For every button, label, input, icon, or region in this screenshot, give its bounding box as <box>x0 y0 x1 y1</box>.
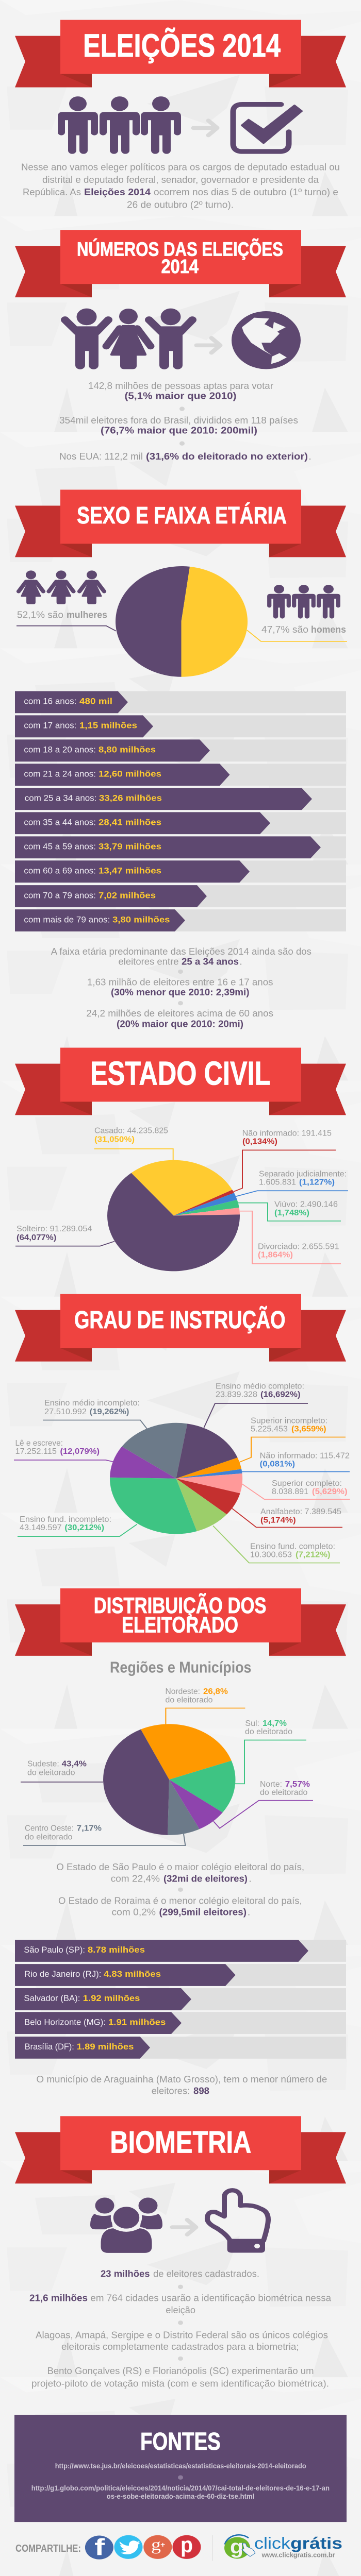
stat: fully registered colleges: eleitorais completamente cadastrados para a biometria; <box>61 2342 299 2352</box>
separator dot <box>178 970 183 974</box>
title ribbon: Grau de Instrução <box>15 1294 346 1362</box>
label: ensino fundamental incompleto <box>18 1514 137 1536</box>
text: predominant age range: . <box>239 957 242 967</box>
stat: smallest municipality <box>36 2074 327 2096</box>
title ribbon: Sexo e Faixa Etária <box>15 490 346 557</box>
label: men share <box>261 625 346 635</box>
bar: mais de 79 anos: 3,80 milhões <box>112 914 170 924</box>
label: ensino fundamental completo: Ensino fund. completo: <box>250 1541 335 1551</box>
stat: voters in the USA: . <box>308 451 311 462</box>
intro paragraph: 26 de outubro (2º turno). <box>127 200 234 210</box>
label: viúvo <box>238 1199 341 1221</box>
bar: 25 a 34 anos: com 25 a 34 anos: <box>25 793 96 803</box>
stat: registered voters <box>101 2269 259 2279</box>
bar: 35 a 44 anos: 28,41 milhões <box>99 817 161 827</box>
label: ensino médio completo: (16,692%) <box>260 1389 301 1399</box>
subheading: regiões e municípios: Regiões e Municípios <box>110 1659 252 1676</box>
label: ensino médio incompleto: (19,262%) <box>90 1406 129 1416</box>
icon: pointing hand <box>207 2190 268 2252</box>
bar: 16 anos: com 16 anos: <box>24 696 76 706</box>
label: casado: Casado: 44.235.825 <box>94 1126 168 1135</box>
label: não informado: Não informado: 115.472 <box>260 1451 350 1460</box>
stat: voters aged 16 and 17: (30% menor que 2010: 2,39mi) <box>111 988 249 998</box>
text: predominant age range: 25 a 34 anos <box>182 957 239 967</box>
panel: fontes <box>14 2415 347 2522</box>
label: women share <box>17 610 107 620</box>
label: separado judicialmente: Separado judicialmente: <box>259 1169 347 1178</box>
icon: google plus: + <box>160 2541 166 2549</box>
label: separado judicialmente: 1.605.831 <box>259 1177 296 1187</box>
bar: Brasília: Brasília (DF): <box>25 2041 74 2051</box>
bar: São Paulo: São Paulo (SP): <box>24 1944 85 1954</box>
bar: 16 anos <box>15 691 346 713</box>
section: introduction <box>15 20 346 210</box>
bar: 45 a 59 anos: 33,79 milhões <box>99 841 161 851</box>
bar: Brasília <box>15 2037 346 2059</box>
bar: 45 a 59 anos <box>15 836 346 858</box>
bar: Belo Horizonte: Belo Horizonte (MG): <box>24 2017 106 2027</box>
bar: Salvador: Salvador (BA): <box>24 1993 80 2003</box>
icon: arrow <box>196 338 220 353</box>
icon: google plus <box>143 2535 172 2559</box>
icon: pinterest: p <box>180 2533 193 2557</box>
separator dot <box>178 2320 183 2325</box>
bar: Belo Horizonte <box>15 2012 346 2034</box>
label: não informado <box>234 1128 336 1192</box>
icon: twitter <box>114 2535 142 2559</box>
bar: 17 anos: com 17 anos: <box>24 720 76 730</box>
stat: voters above 60: (20% maior que 2010: 20mi) <box>117 1019 243 1029</box>
stat: voters abroad: (76,7% maior que 2010: 200mil) <box>101 426 257 436</box>
stat: voters in the USA: (31,6% do eleitorado no exterior) <box>146 451 308 462</box>
title ribbon: Distribuição dos Eleitorado: DISTRIBUIÇÃO DOS <box>94 1593 266 1618</box>
pie chart: regions <box>103 1724 236 1835</box>
title ribbon: Distribuição dos Eleitorado: ELEITORADO <box>122 1613 238 1638</box>
separator dot <box>178 2285 183 2289</box>
section: sexo e faixa etária <box>15 490 347 1029</box>
section: números das eleições <box>15 230 346 462</box>
title ribbon: Biometria <box>15 2116 346 2183</box>
icon: three men <box>58 96 181 154</box>
stat: smallest municipality: 898 <box>193 2086 209 2096</box>
stat: cities using biometrics <box>29 2293 332 2315</box>
stat: registered voters: 23 milhões <box>101 2269 150 2279</box>
label: sul: 14,7% <box>262 1718 287 1727</box>
label: solteiro <box>15 1224 114 1246</box>
icon: pinterest <box>172 2533 201 2559</box>
stat: pilot project: Bento Gonçalves (RS) e Florianópolis (SC) experimentarão um <box>47 2366 314 2377</box>
bar: 70 a 79 anos <box>15 885 346 907</box>
icon: google plus: g <box>151 2535 161 2554</box>
intro paragraph: ocorrem nos dias 5 de outubro (1º turno) e <box>154 188 338 198</box>
logo: clickgrátis: grátis <box>290 2534 342 2552</box>
label: women share: mulheres <box>67 610 107 620</box>
stat: São Paulo largest: . <box>249 1874 252 1884</box>
label: ensino médio incompleto <box>43 1398 147 1429</box>
label: ensino fundamental incompleto: (30,212%) <box>64 1522 104 1532</box>
stat: smallest municipality: eleitores: <box>152 2086 190 2096</box>
label: superior incompleto: Superior incompleto: <box>251 1416 327 1425</box>
icon: arrow <box>172 2220 196 2234</box>
label: ensino fundamental completo: (7,212%) <box>296 1550 331 1559</box>
bar: 25 a 34 anos: 33,26 milhões <box>99 793 162 803</box>
separator dot <box>179 442 185 446</box>
label: centro oeste: Centro Oeste: <box>25 1823 74 1833</box>
label: superior completo: Superior completo: <box>272 1479 342 1488</box>
label: ensino médio incompleto: 27.510.992 <box>44 1406 87 1416</box>
stat: voters aged 16 and 17: 1,63 milhão de eleitores entre 16 e 17 anos <box>87 977 273 988</box>
label: não informado <box>242 1451 350 1472</box>
icon: facebook <box>85 2534 113 2561</box>
label: superior completo: (5,629%) <box>312 1487 348 1496</box>
title ribbon: Biometria: BIOMETRIA <box>110 2125 251 2160</box>
stat: voters in the USA: Nos EUA: 112,2 mil <box>59 451 143 462</box>
intro paragraph <box>21 162 340 210</box>
label: superior incompleto <box>239 1416 346 1462</box>
separator dot <box>178 1001 183 1005</box>
bar: Belo Horizonte: 1.91 milhões <box>108 2017 166 2027</box>
bar: 21 a 24 anos <box>15 764 346 786</box>
text: predominant age range <box>51 947 311 967</box>
label: divorciado: (1,864%) <box>258 1250 293 1259</box>
logo: clickgrátis: www.clickgratis.com.br <box>261 2551 335 2558</box>
label: nordeste: Nordeste: <box>165 1686 200 1696</box>
icon: people with raised arms <box>65 309 192 369</box>
stat: eligible voters: (5,1% maior que 2010) <box>125 391 236 401</box>
bar: 60 a 69 anos: 13,47 milhões <box>99 866 161 875</box>
stat: pilot project <box>31 2366 329 2389</box>
bar: 60 a 69 anos: com 60 a 69 anos: <box>24 866 96 875</box>
bar: 21 a 24 anos: com 21 a 24 anos: <box>24 769 96 778</box>
stat: São Paulo largest: (32mi de eleitores) <box>163 1874 248 1884</box>
title ribbon: Números das Eleições 2014 <box>15 230 346 297</box>
title ribbon: Eleições 2014 <box>15 20 346 87</box>
label: norte: do eleitorado <box>260 1788 307 1797</box>
label: não informado: (0,134%) <box>242 1137 277 1146</box>
label: casado: (31,050%) <box>94 1134 135 1144</box>
bar chart: voters by age <box>15 691 346 931</box>
label: norte <box>214 1780 313 1828</box>
label: analfabeto: Analfabeto: 7.389.545 <box>260 1506 341 1516</box>
label: lê e escreve: Lê e escreve: <box>15 1438 63 1448</box>
bar: Brasília: 1.89 milhões <box>77 2041 134 2051</box>
stat: Roraima smallest: com 0,2% <box>111 1907 156 1918</box>
stat: voters abroad: 354mil eleitores fora do Brasil, divididos em 118 países <box>59 416 298 426</box>
bar: Rio de Janeiro: 4.83 milhões <box>104 1969 161 1978</box>
bar: 60 a 69 anos <box>15 860 346 883</box>
label: norte: Norte: <box>260 1780 282 1789</box>
bar: 17 anos <box>15 715 346 737</box>
label: men share: 47,7% são <box>261 625 308 635</box>
label: ensino médio incompleto: Ensino médio incompleto: <box>44 1398 140 1408</box>
stat: cities using biometrics: eleição <box>166 2305 195 2315</box>
source link: G1 <box>31 2484 330 2500</box>
section: distribuição do eleitorado <box>15 1588 346 2096</box>
stat: voters in the USA <box>59 451 311 462</box>
pie chart: sex <box>116 566 248 677</box>
section: estado civil <box>15 1048 348 1271</box>
label: superior completo <box>242 1479 350 1499</box>
label: solteiro: Solteiro: 91.289.054 <box>17 1224 92 1233</box>
stat: cities using biometrics: 21,6 milhões <box>29 2293 88 2303</box>
stat: voters above 60: 24,2 milhões de eleitores acima de 60 anos <box>86 1009 273 1019</box>
label: men share: homens <box>311 625 346 635</box>
label: compartilhe: COMPARTILHE: <box>15 2543 81 2554</box>
intro paragraph: República. As <box>23 188 81 198</box>
icon: group of people <box>90 2198 162 2253</box>
icon: three men <box>267 585 340 619</box>
label: analfabeto <box>232 1506 342 1528</box>
bar: 45 a 59 anos: com 45 a 59 anos: <box>24 841 96 851</box>
text: predominant age range: A faixa etária predominante das Eleições 2014 ainda são dos <box>51 947 311 957</box>
source link: G1: os-e-sobe-eleitorado-acima-de-60-diz-tse.html <box>107 2493 254 2500</box>
label: viúvo: Viúvo: 2.490.146 <box>274 1199 338 1209</box>
stat: fully registered colleges <box>36 2330 328 2352</box>
label: centro oeste: do eleitorado <box>25 1832 73 1841</box>
bar: mais de 79 anos: com mais de 79 anos: <box>24 914 110 924</box>
bar: mais de 79 anos <box>15 909 346 931</box>
icon: three women <box>19 570 104 604</box>
stat: voters above 60 <box>86 1009 273 1029</box>
text: predominant age range: eleitores entre <box>119 957 178 967</box>
stat: eligible voters: 142,8 milhões de pessoas aptas para votar <box>88 381 273 392</box>
section: biometria <box>15 2116 346 2389</box>
bar chart: cities with most voters <box>15 1940 346 2059</box>
label: superior incompleto: 5.225.453 <box>251 1424 288 1433</box>
stat: São Paulo largest: com 22,4% <box>111 1874 160 1884</box>
bar: 18 a 20 anos: 8,80 milhões <box>99 744 156 754</box>
bar: Rio de Janeiro: Rio de Janeiro (RJ): <box>24 1969 101 1978</box>
label: sudeste: Sudeste: <box>27 1759 59 1768</box>
stat: voters aged 16 and 17 <box>87 977 273 998</box>
intro paragraph: Eleições 2014 <box>84 188 151 198</box>
title ribbon: Distribuição dos Eleitorado <box>15 1588 346 1656</box>
label: sul: Sul: <box>245 1718 259 1727</box>
bar: 18 a 20 anos: com 18 a 20 anos: <box>24 744 96 754</box>
logo: clickgrátis <box>224 2534 342 2558</box>
label: divorciado: Divorciado: 2.655.591 <box>258 1242 339 1251</box>
bar: 35 a 44 anos: com 35 a 44 anos: <box>24 817 96 827</box>
leader line: women <box>17 626 116 631</box>
label: divorciado <box>240 1211 341 1264</box>
divider <box>212 2535 213 2561</box>
label: nordeste: 26,8% <box>203 1686 228 1696</box>
pie chart: marital status <box>107 1160 240 1271</box>
stat: registered voters: de eleitores cadastrados. <box>153 2269 259 2279</box>
bar: São Paulo <box>15 1940 346 1962</box>
label: ensino médio completo: Ensino médio completo: <box>216 1381 304 1391</box>
footer: share <box>15 2533 342 2561</box>
label: ensino fundamental incompleto: Ensino fund. incompleto: <box>20 1514 111 1523</box>
title ribbon: Números das Eleições 2014: 2014 <box>161 256 199 277</box>
stat: Roraima smallest: O Estado de Roraima é o menor colégio eleitoral do país, <box>58 1896 302 1906</box>
stat: São Paulo largest <box>56 1862 304 1884</box>
label: women share: 52,1% são <box>17 610 63 620</box>
label: lê e escreve: (12,079%) <box>60 1447 100 1456</box>
logo: clickgrátis: g <box>230 2536 243 2558</box>
separator dot <box>178 2476 183 2480</box>
label: não informado: Não informado: 191.415 <box>242 1128 332 1138</box>
icon: arrow <box>193 121 217 135</box>
stat: Roraima smallest <box>58 1896 302 1918</box>
section: grau de instrução <box>14 1294 350 1563</box>
stat: Roraima smallest: (299,5mil eleitores) <box>159 1907 247 1918</box>
heading: fontes: FONTES <box>140 2428 221 2455</box>
icon: ballot checkbox <box>233 105 302 151</box>
separator dot <box>178 2357 183 2361</box>
label: nordeste: do eleitorado <box>165 1695 212 1704</box>
icon: globe <box>232 311 301 369</box>
pie chart: education level <box>110 1423 242 1534</box>
separator dot <box>178 1888 183 1892</box>
icon: facebook: f <box>94 2534 105 2561</box>
bar: 70 a 79 anos: com 70 a 79 anos: <box>24 890 96 900</box>
label: sul <box>235 1718 306 1784</box>
label: ensino médio completo <box>204 1381 308 1428</box>
label: nordeste <box>165 1686 245 1724</box>
bar: 21 a 24 anos: 12,60 milhões <box>99 769 161 778</box>
label: lê e escreve: 17.252.115 <box>15 1447 57 1456</box>
bar: 70 a 79 anos: 7,02 milhões <box>99 890 156 900</box>
label: ensino médio completo: 23.839.328 <box>216 1389 257 1399</box>
bar: 16 anos: 480 mil <box>79 696 112 706</box>
label: centro oeste <box>23 1823 185 1845</box>
label: viúvo: (1,748%) <box>274 1208 309 1217</box>
label: superior incompleto: (3,659%) <box>291 1424 326 1433</box>
label: ensino fundamental incompleto: 43.149.597 <box>20 1522 62 1532</box>
stat: eligible voters <box>88 381 273 401</box>
label: casado <box>94 1126 173 1160</box>
label: ensino fundamental completo <box>213 1526 340 1563</box>
label: analfabeto: (5,174%) <box>260 1515 296 1524</box>
stat: voters abroad <box>59 416 298 436</box>
label: sudeste <box>21 1759 103 1782</box>
label: ensino fundamental completo: 10.300.653 <box>250 1550 292 1559</box>
label: solteiro: (64,077%) <box>17 1232 56 1242</box>
label: separado judicialmente <box>236 1169 348 1196</box>
bar: 17 anos: 1,15 milhões <box>79 720 137 730</box>
label: sudeste: do eleitorado <box>27 1768 75 1777</box>
logo: clickgrátis: click <box>254 2534 290 2552</box>
label: não informado: (0,081%) <box>260 1459 295 1468</box>
leader line: men <box>247 630 347 641</box>
label: centro oeste: 7,17% <box>77 1823 102 1833</box>
stat: São Paulo largest: O Estado de São Paulo é o maior colégio eleitoral do país, <box>56 1862 304 1873</box>
separator dot <box>179 406 185 411</box>
bar: 18 a 20 anos <box>15 739 346 761</box>
bar: Salvador <box>15 1988 346 2010</box>
bar: Rio de Janeiro <box>15 1964 346 1986</box>
label: separado judicialmente: (1,127%) <box>299 1177 335 1187</box>
title ribbon: Estado Civil: ESTADO CIVIL <box>90 1055 270 1092</box>
label: superior completo: 8.038.891 <box>272 1487 308 1496</box>
label: sul: do eleitorado <box>245 1726 292 1736</box>
intro paragraph: distrital e deputado federal, senador, governador e presidente da <box>42 175 319 185</box>
label: lê e escreve <box>14 1438 113 1462</box>
bar: São Paulo: 8.78 milhões <box>88 1944 145 1954</box>
label: sudeste: 43,4% <box>62 1759 87 1768</box>
label: norte: 7,57% <box>285 1780 310 1789</box>
bar: Salvador: 1.92 milhões <box>83 1993 140 2003</box>
bar: 35 a 44 anos <box>15 812 346 834</box>
title ribbon: Estado Civil <box>15 1048 346 1115</box>
stat: Roraima smallest: . <box>247 1907 251 1918</box>
bar: 25 a 34 anos <box>15 788 346 810</box>
